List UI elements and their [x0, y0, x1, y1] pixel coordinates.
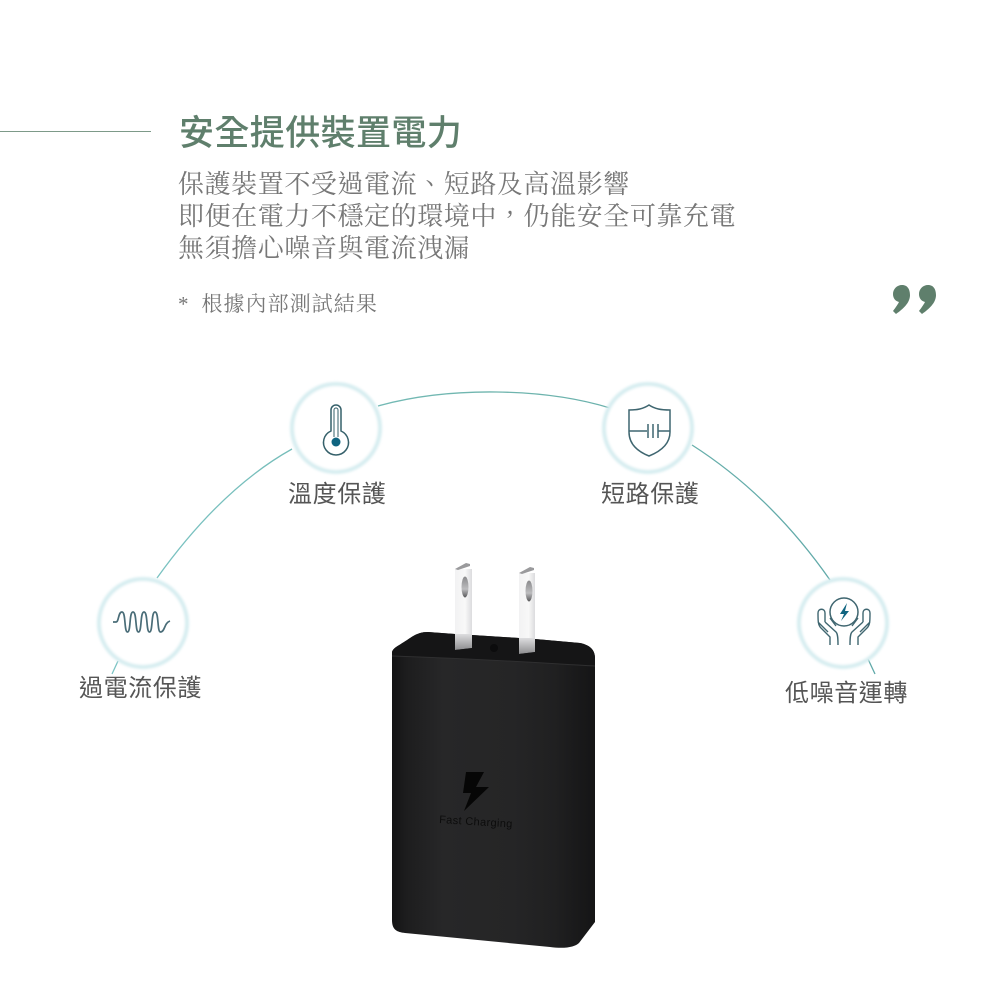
title: 安全提供裝置電力 — [179, 114, 462, 153]
description text: 無須擔心噪音與電流洩漏 — [178, 234, 470, 263]
footnote: * 根據內部測試結果 — [178, 292, 378, 316]
description text — [178, 170, 736, 263]
prong right — [519, 567, 535, 654]
description text: 保護裝置不受過電流、短路及高溫影響 — [178, 170, 630, 199]
label: overcurrent: 過電流保護 — [79, 675, 202, 702]
description text: 即便在電力不穩定的環境中，仍能安全可靠充電 — [178, 202, 736, 231]
prong left — [455, 563, 472, 650]
icon: shield circle — [604, 384, 692, 472]
arc connector — [112, 392, 875, 674]
charger body — [392, 632, 595, 948]
icon: current wave circle — [99, 579, 187, 667]
label: short circuit: 短路保護 — [601, 481, 699, 508]
icon: lightning bolt — [463, 772, 489, 811]
label: temperature: 溫度保護 — [288, 481, 386, 508]
label: low noise: 低噪音運轉 — [785, 680, 908, 707]
divider line — [0, 131, 151, 132]
charger top shoulder — [392, 632, 595, 666]
charger product — [392, 563, 595, 948]
icon: hands holding energy circle — [799, 579, 887, 667]
icon: thermometer circle — [292, 384, 380, 472]
device text: Fast Charging — [439, 814, 513, 830]
